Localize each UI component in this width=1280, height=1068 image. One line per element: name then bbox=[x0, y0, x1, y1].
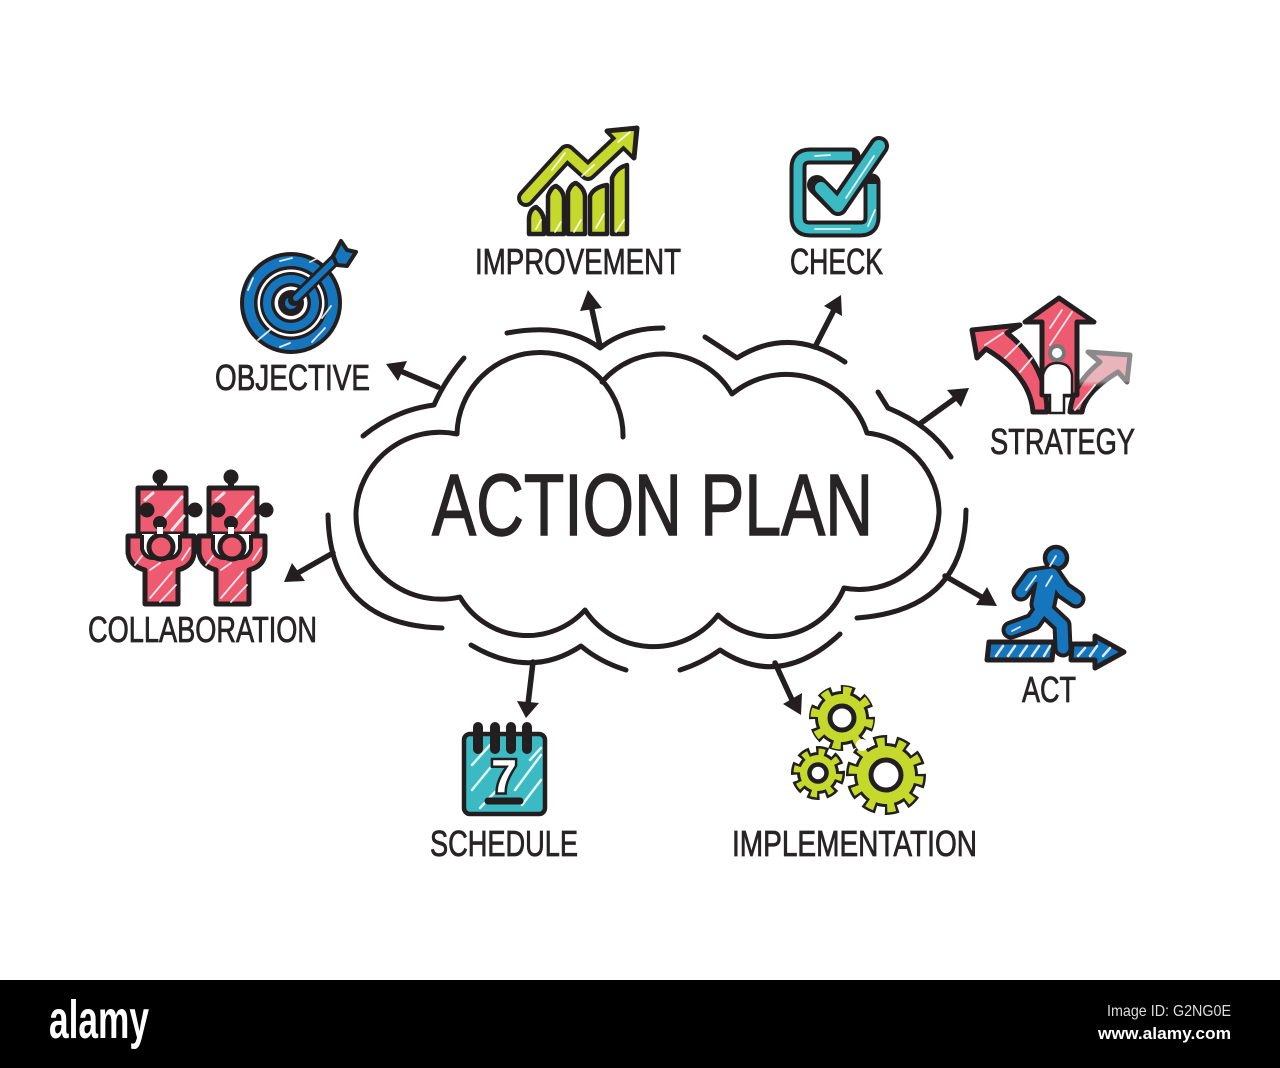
title: ACTION PLAN bbox=[432, 457, 873, 554]
icon: person stepping on arrow bbox=[987, 547, 1124, 668]
label: implementation: IMPLEMENTATION bbox=[732, 823, 977, 864]
arrow: act bbox=[945, 576, 997, 606]
icon: rising chart bbox=[526, 128, 637, 234]
label: objective: OBJECTIVE bbox=[215, 357, 370, 398]
footer image id: Image ID: G2NG0E bbox=[1107, 1003, 1231, 1020]
arrow: collaboration bbox=[284, 553, 333, 582]
small gear bbox=[795, 750, 841, 796]
label: check: CHECK bbox=[790, 241, 883, 282]
icon: strategy arrows bbox=[972, 298, 1130, 413]
footer website: www.alamy.com bbox=[1097, 1024, 1231, 1043]
icon: calendar: 7 bbox=[491, 750, 517, 802]
icon: calendar bbox=[464, 727, 545, 814]
footer logo: alamy bbox=[49, 990, 149, 1050]
arrow: implementation bbox=[775, 663, 802, 715]
label: improvement: IMPROVEMENT bbox=[475, 241, 681, 282]
footer bar bbox=[0, 980, 1280, 1068]
icon: target bbox=[240, 241, 356, 354]
left figure bbox=[128, 470, 202, 604]
arrow: strategy bbox=[921, 388, 969, 423]
right figure bbox=[199, 470, 274, 604]
label: act: ACT bbox=[1022, 669, 1076, 710]
large gear bbox=[851, 740, 921, 810]
icon: gears bbox=[795, 690, 921, 810]
arrow: objective bbox=[386, 361, 438, 387]
top gear bbox=[814, 690, 870, 746]
arrow: schedule bbox=[517, 662, 539, 718]
label: collaboration: COLLABORATION bbox=[88, 609, 317, 650]
arrow: check bbox=[815, 295, 842, 347]
outer cloud arcs bbox=[328, 328, 966, 670]
arrow: improvement bbox=[580, 290, 602, 346]
central cloud bbox=[356, 353, 939, 647]
icon: checkbox bbox=[798, 146, 879, 229]
icon: collaboration people with puzzle pieces bbox=[128, 470, 274, 604]
label: strategy: STRATEGY bbox=[990, 421, 1135, 462]
label: schedule: SCHEDULE bbox=[430, 823, 578, 864]
